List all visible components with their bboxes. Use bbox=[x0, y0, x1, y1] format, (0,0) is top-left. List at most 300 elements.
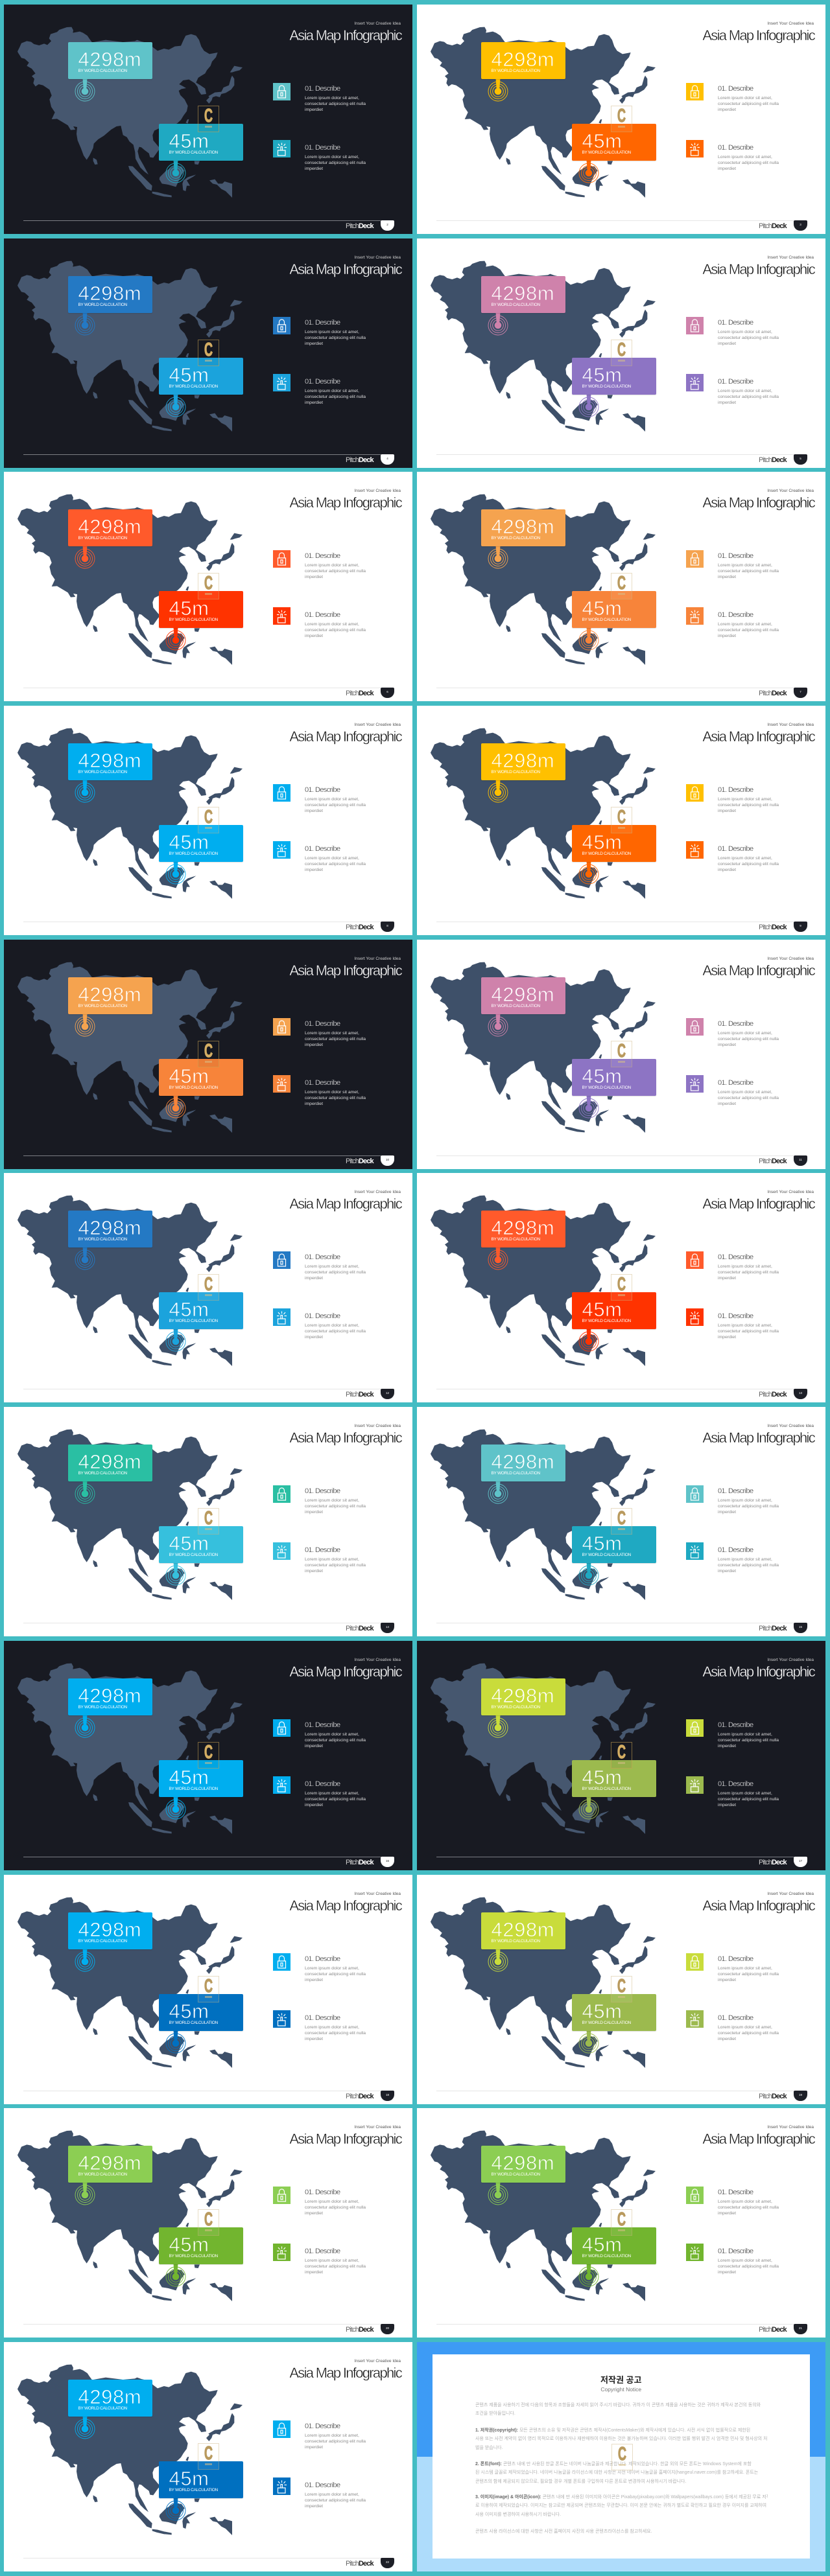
callout 1: 4298m bbox=[78, 2152, 141, 2174]
text 1: Lorem ipsum dolor sit amet, bbox=[305, 1030, 359, 1036]
text 2: Lorem ipsum dolor sit amet, bbox=[305, 1557, 359, 1562]
brand: PitchDeck bbox=[759, 2092, 787, 2100]
paragraph: image and icon: 3. 이미지(image) & 아이콘(icon): 콘텐츠 내에 만 사용된 이미지와 아이콘은 Pixabay(pixabay.com)와 Wallpapers(wallbays.com) 등에서 제공된 무료 저작물 bbox=[475, 2495, 768, 2500]
heading 2: 01. Describe bbox=[718, 377, 753, 385]
callout 1 bbox=[68, 1445, 152, 1481]
paragraph: font bbox=[475, 2460, 768, 2486]
text 1: imperdiet bbox=[305, 575, 323, 579]
paragraph: image and icon: 로 이용하여 제작되었습니다. 이미지는 참고로만 제공되며 콘텐츠와는 무관합니다. 이미 본문 안에는 귀하가 별도로 확인하고 필요한 경우 이미지를 교체하여 bbox=[475, 2503, 766, 2508]
text 1 bbox=[718, 1965, 779, 1983]
text 1: imperdiet bbox=[718, 1276, 736, 1281]
watermark: C bbox=[204, 1041, 213, 1062]
slide 10 bbox=[417, 940, 825, 1169]
text 2: imperdiet bbox=[305, 1803, 323, 1807]
callout 1: BY WORLD CALCULATION bbox=[78, 535, 127, 540]
text 2 bbox=[305, 2491, 366, 2509]
callout 2: BY WORLD CALCULATION bbox=[169, 617, 218, 622]
callout 1: 4298m bbox=[78, 749, 141, 772]
text 2: consectetur adipiscing elit nulla bbox=[305, 862, 366, 866]
text 1: Lorem ipsum dolor sit amet, bbox=[305, 1498, 359, 1502]
callout 2 bbox=[159, 2227, 243, 2264]
text 2: imperdiet bbox=[305, 1569, 323, 1573]
text 1: consectetur adipiscing elit nulla bbox=[718, 1037, 779, 1041]
text 2: Lorem ipsum dolor sit amet, bbox=[305, 389, 359, 393]
marker 2 bbox=[576, 861, 602, 887]
callout 2 bbox=[159, 1526, 243, 1563]
watermark: C bbox=[204, 807, 213, 828]
callout 1: BY WORLD CALCULATION bbox=[492, 535, 540, 540]
slide 4 bbox=[417, 238, 825, 468]
callout 2 bbox=[159, 1760, 243, 1797]
text 1: Lorem ipsum dolor sit amet, bbox=[305, 1732, 359, 1737]
page number bbox=[794, 1857, 807, 1867]
text 2: consectetur adipiscing elit nulla bbox=[718, 1329, 779, 1334]
map bbox=[15, 2123, 248, 2330]
callout 2: BY WORLD CALCULATION bbox=[169, 384, 218, 389]
text 1: Lorem ipsum dolor sit amet, bbox=[718, 2199, 772, 2203]
page number: 8 bbox=[386, 924, 388, 927]
title: Asia Map Infographic bbox=[702, 2131, 814, 2146]
marker 1 bbox=[72, 1247, 98, 1273]
map bbox=[428, 1656, 661, 1863]
heading 2: 01. Describe bbox=[718, 144, 753, 152]
text 2: consectetur adipiscing elit nulla bbox=[305, 2031, 366, 2036]
callout 1: 4298m bbox=[78, 515, 141, 538]
text 2: Lorem ipsum dolor sit amet, bbox=[305, 2258, 359, 2263]
callout 2: 45m bbox=[169, 831, 209, 853]
text 1 bbox=[305, 1264, 366, 1281]
text 1: imperdiet bbox=[305, 1978, 323, 1982]
marker 2 bbox=[578, 628, 599, 651]
page number bbox=[381, 454, 394, 465]
title: Asia Map Infographic bbox=[702, 1663, 814, 1680]
callout 1 bbox=[68, 276, 152, 313]
marker 1 bbox=[488, 79, 508, 101]
callout 1 bbox=[68, 509, 152, 546]
text 2 bbox=[718, 855, 779, 873]
callout 1: 4298m bbox=[78, 48, 141, 71]
title: Asia Map Infographic bbox=[289, 728, 401, 744]
callout 2 bbox=[159, 825, 243, 862]
icon: hand bbox=[273, 1075, 290, 1093]
callout 2: 45m bbox=[169, 1298, 209, 1321]
text 1 bbox=[718, 1497, 779, 1515]
map bbox=[15, 1188, 248, 1395]
watermark: C bbox=[618, 2444, 626, 2465]
watermark bbox=[611, 1508, 632, 1535]
callout 2 bbox=[159, 1059, 243, 1096]
callout 2 bbox=[572, 591, 656, 628]
subtitle: Insert Your Creative Idea bbox=[354, 1658, 401, 1662]
text 1: consectetur adipiscing elit nulla bbox=[305, 1270, 366, 1275]
callout 1: 4298m bbox=[492, 2152, 554, 2174]
icon: lock bbox=[273, 2420, 290, 2438]
heading 1: 01. Describe bbox=[305, 785, 340, 793]
callout 2: 45m bbox=[582, 597, 622, 620]
map bbox=[431, 27, 656, 198]
watermark: C bbox=[617, 573, 626, 594]
brand: PitchDeck bbox=[346, 2560, 374, 2568]
text 1 bbox=[718, 1264, 779, 1281]
callout 1 bbox=[68, 977, 152, 1014]
callout 1: BY WORLD CALCULATION bbox=[78, 1939, 127, 1943]
heading 2: 01. Describe bbox=[718, 1312, 753, 1319]
icon: hand bbox=[273, 1308, 290, 1326]
brand: PitchDeck bbox=[759, 2325, 787, 2333]
icon: hand bbox=[273, 2244, 290, 2261]
callout 1: 4298m bbox=[78, 1216, 141, 1239]
slide 19 bbox=[4, 2108, 412, 2337]
icon: hand bbox=[273, 2010, 290, 2028]
callout 1: BY WORLD CALCULATION bbox=[78, 69, 127, 73]
slide 20 bbox=[417, 2108, 825, 2337]
marker 2 bbox=[576, 1329, 602, 1354]
icon: hand bbox=[273, 841, 290, 859]
page number: 13 bbox=[799, 1391, 802, 1395]
heading 1: 01. Describe bbox=[305, 1721, 340, 1729]
icon: lock bbox=[273, 83, 290, 100]
watermark bbox=[611, 1274, 632, 1301]
paragraph: font: 된 시스템 글꼴로 제작되었습니다. 네이버 나눔글꼴 라이선스에 대한 사항은 사전 네이버 나눔글꼴 홈페이지(hangeul.naver.com)를 참고하세요. 폰트는 bbox=[475, 2470, 758, 2475]
callout 2: BY WORLD CALCULATION bbox=[169, 2487, 218, 2492]
text 2: Lorem ipsum dolor sit amet, bbox=[305, 1090, 359, 1094]
brand: PitchDeck bbox=[759, 1391, 787, 1398]
heading 1: 01. Describe bbox=[305, 1487, 340, 1494]
callout 1: 4298m bbox=[78, 1918, 141, 1941]
callout 1: 4298m bbox=[492, 749, 554, 772]
callout 1: 4298m bbox=[492, 282, 554, 305]
brand: PitchDeck bbox=[346, 1391, 374, 1398]
callout 1 bbox=[481, 977, 565, 1014]
brand: PitchDeck bbox=[759, 456, 787, 464]
page number bbox=[381, 1389, 394, 1399]
callout 2: BY WORLD CALCULATION bbox=[169, 1553, 218, 1557]
icon: lock bbox=[686, 1719, 704, 1737]
page number: 2 bbox=[386, 223, 388, 226]
text 2 bbox=[718, 2258, 779, 2275]
callout 1: BY WORLD CALCULATION bbox=[492, 2172, 540, 2176]
text 1 bbox=[305, 2433, 366, 2450]
callout 1 bbox=[481, 2146, 565, 2183]
closing paragraph: 콘텐츠 사용 라이선스에 대한 사항은 사전 홈페이지 사진의 사용 콘텐츠라이선스를 참고하세요. bbox=[475, 2529, 652, 2534]
watermark: C bbox=[617, 1742, 626, 1763]
paragraph: image and icon bbox=[475, 2493, 768, 2519]
callout 2: BY WORLD CALCULATION bbox=[169, 150, 218, 154]
heading 2: 01. Describe bbox=[718, 610, 753, 618]
text 2: Lorem ipsum dolor sit amet, bbox=[305, 622, 359, 626]
text 1: consectetur adipiscing elit nulla bbox=[718, 803, 779, 807]
heading 1: 01. Describe bbox=[718, 1020, 753, 1028]
heading 1: 01. Describe bbox=[305, 552, 340, 560]
heading 1: 01. Describe bbox=[718, 1955, 753, 1962]
page number: 12 bbox=[386, 1391, 389, 1395]
callout 2 bbox=[572, 1760, 656, 1797]
map bbox=[18, 27, 243, 198]
callout 1: 4298m bbox=[492, 1216, 554, 1239]
text 1 bbox=[305, 96, 366, 112]
page number bbox=[794, 2324, 807, 2334]
watermark: C bbox=[617, 1508, 626, 1529]
icon: hand bbox=[686, 374, 704, 391]
subtitle: Insert Your Creative Idea bbox=[354, 255, 401, 259]
text 2: consectetur adipiscing elit nulla bbox=[718, 628, 779, 632]
callout 1: BY WORLD CALCULATION bbox=[492, 770, 540, 774]
text 1 bbox=[305, 1732, 366, 1749]
icon: lock bbox=[686, 317, 704, 334]
marker 2 bbox=[166, 395, 185, 417]
text 2: Lorem ipsum dolor sit amet, bbox=[718, 1323, 772, 1327]
page number: 15 bbox=[799, 1625, 802, 1629]
map bbox=[428, 955, 661, 1162]
map bbox=[431, 494, 656, 665]
paragraph: image and icon: 사용 이미지를 변경하여 사용하시기 바랍니다. bbox=[475, 2512, 561, 2517]
text 1 bbox=[305, 1965, 366, 1983]
paragraph: copyright: 사용 또는 사전 계약이 없이 영리 목적으로 이용하거나 재판매하여 이용하는 것은 불가능하며 있습니다. 이러한 법률 행위 발견 시 엄격한 민사 및 형사상의 처 bbox=[475, 2437, 767, 2441]
callout 2 bbox=[572, 2227, 656, 2264]
heading 1: 01. Describe bbox=[718, 1253, 753, 1261]
text 2: Lorem ipsum dolor sit amet, bbox=[718, 1557, 772, 1562]
text 1: consectetur adipiscing elit nulla bbox=[718, 1270, 779, 1275]
callout 2: 45m bbox=[582, 1766, 622, 1789]
watermark bbox=[198, 1274, 219, 1301]
callout 2 bbox=[572, 1526, 656, 1563]
slide 12 bbox=[417, 1173, 825, 1402]
callout 1 bbox=[481, 1912, 565, 1949]
heading 1: 01. Describe bbox=[718, 785, 753, 793]
callout 2: 45m bbox=[169, 130, 209, 152]
text 1: Lorem ipsum dolor sit amet, bbox=[305, 1264, 359, 1269]
text 2 bbox=[718, 622, 779, 638]
watermark bbox=[198, 106, 219, 132]
page number bbox=[381, 1623, 394, 1633]
icon: hand bbox=[686, 2010, 704, 2028]
text 2: imperdiet bbox=[305, 400, 323, 405]
heading 1: 01. Describe bbox=[718, 2188, 753, 2196]
watermark: C bbox=[204, 1742, 213, 1763]
callout 1 bbox=[481, 743, 565, 780]
callout 2: BY WORLD CALCULATION bbox=[582, 1786, 631, 1791]
brand: PitchDeck bbox=[346, 1624, 374, 1632]
icon: lock bbox=[273, 1953, 290, 1971]
icon: hand bbox=[686, 2244, 704, 2261]
brand: PitchDeck bbox=[346, 1859, 374, 1866]
intro paragraph: 조건을 받아들입니다. bbox=[475, 2411, 516, 2416]
text 2: consectetur adipiscing elit nulla bbox=[718, 862, 779, 866]
map bbox=[15, 2357, 248, 2564]
text 2: imperdiet bbox=[718, 167, 736, 171]
text 2: consectetur adipiscing elit nulla bbox=[305, 395, 366, 399]
title: Asia Map Infographic bbox=[702, 962, 814, 979]
brand: PitchDeck bbox=[759, 923, 787, 931]
text 1: consectetur adipiscing elit nulla bbox=[718, 336, 779, 340]
callout 1: 4298m bbox=[492, 515, 554, 538]
subtitle: Insert Your Creative Idea bbox=[354, 2124, 401, 2129]
callout 1: BY WORLD CALCULATION bbox=[492, 1939, 540, 1943]
callout 1 bbox=[68, 1678, 152, 1715]
page number bbox=[381, 220, 394, 231]
watermark: C bbox=[204, 1976, 213, 1997]
page number: 17 bbox=[799, 1859, 802, 1862]
title: Asia Map Infographic bbox=[289, 2131, 401, 2146]
title: Asia Map Infographic bbox=[289, 261, 401, 277]
text 1: imperdiet bbox=[718, 342, 736, 346]
icon: hand bbox=[686, 1542, 704, 1560]
heading 2: 01. Describe bbox=[718, 1780, 753, 1787]
icon: lock bbox=[686, 784, 704, 802]
callout 1: BY WORLD CALCULATION bbox=[78, 770, 127, 774]
callout 1: BY WORLD CALCULATION bbox=[492, 1471, 540, 1475]
callout 1 bbox=[68, 2380, 152, 2417]
paragraph: font: 2. 폰트(font): 콘텐츠 내에 만 사용된 한글 폰트는 네이버 나눔글꼴과 제공합니다. 제작되었습니다. 한글 외의 모든 폰트는 Windows System에 포함 bbox=[475, 2462, 752, 2466]
callout 2: 45m bbox=[582, 2000, 622, 2023]
text 2: imperdiet bbox=[305, 2270, 323, 2275]
text 2 bbox=[305, 154, 366, 171]
callout 1: BY WORLD CALCULATION bbox=[492, 302, 540, 307]
brand: PitchDeck bbox=[759, 1624, 787, 1632]
slide 2 bbox=[417, 5, 825, 233]
subtitle: Insert Your Creative Idea bbox=[767, 21, 814, 26]
title: Asia Map Infographic bbox=[702, 27, 814, 43]
title: Asia Map Infographic bbox=[289, 962, 401, 979]
text 1: consectetur adipiscing elit nulla bbox=[305, 2205, 366, 2210]
title: Asia Map Infographic bbox=[289, 27, 401, 43]
callout 1: BY WORLD CALCULATION bbox=[492, 1003, 540, 1008]
watermark bbox=[611, 106, 632, 132]
page number bbox=[794, 1623, 807, 1633]
map bbox=[428, 721, 661, 928]
text 2: consectetur adipiscing elit nulla bbox=[305, 628, 366, 632]
copyright subheading: Copyright Notice bbox=[600, 2386, 641, 2393]
slide 16 bbox=[417, 1641, 825, 1870]
marker 2 bbox=[576, 1562, 602, 1588]
callout 1 bbox=[481, 1678, 565, 1715]
text 1: imperdiet bbox=[718, 1510, 736, 1514]
heading 2: 01. Describe bbox=[305, 2247, 340, 2255]
page number bbox=[381, 1857, 394, 1867]
text 2: imperdiet bbox=[305, 167, 323, 171]
text 2 bbox=[718, 1790, 779, 1808]
marker 1 bbox=[72, 1481, 98, 1507]
callout 2: 45m bbox=[169, 2233, 209, 2256]
brand: PitchDeck bbox=[346, 923, 374, 931]
title: Asia Map Infographic bbox=[289, 2364, 401, 2381]
icon: hand bbox=[686, 140, 704, 157]
page number bbox=[794, 2091, 807, 2101]
text 1: Lorem ipsum dolor sit amet, bbox=[305, 96, 359, 100]
text 2: consectetur adipiscing elit nulla bbox=[718, 2264, 779, 2269]
icon: lock bbox=[273, 550, 290, 568]
map bbox=[428, 2123, 661, 2330]
text 1: consectetur adipiscing elit nulla bbox=[305, 1738, 366, 1743]
text 1: imperdiet bbox=[718, 809, 736, 813]
icon: lock bbox=[686, 2187, 704, 2204]
title: Asia Map Infographic bbox=[289, 1195, 401, 1212]
callout 2 bbox=[572, 825, 656, 862]
icon: hand bbox=[686, 607, 704, 625]
text 1: consectetur adipiscing elit nulla bbox=[305, 1504, 366, 1509]
text 2: consectetur adipiscing elit nulla bbox=[718, 2031, 779, 2036]
text 2 bbox=[305, 2258, 366, 2275]
callout 2 bbox=[159, 1994, 243, 2031]
heading 1: 01. Describe bbox=[305, 2188, 340, 2196]
subtitle: Insert Your Creative Idea bbox=[767, 1658, 814, 1662]
callout 2: 45m bbox=[169, 597, 209, 620]
page number bbox=[381, 2558, 394, 2568]
text 1: Lorem ipsum dolor sit amet, bbox=[305, 2433, 359, 2438]
watermark: C bbox=[617, 1041, 626, 1062]
text 1: Lorem ipsum dolor sit amet, bbox=[718, 1030, 772, 1036]
brand: PitchDeck bbox=[759, 222, 787, 229]
callout 1: BY WORLD CALCULATION bbox=[78, 1003, 127, 1008]
page number: 18 bbox=[386, 2093, 389, 2096]
marker 2 bbox=[576, 1796, 602, 1822]
text 1: Lorem ipsum dolor sit amet, bbox=[718, 1966, 772, 1970]
text 1: Lorem ipsum dolor sit amet, bbox=[718, 1498, 772, 1502]
brand: PitchDeck bbox=[346, 2092, 374, 2100]
marker 2 bbox=[576, 2030, 602, 2056]
marker 1 bbox=[72, 2416, 98, 2442]
page number: 21 bbox=[799, 2327, 802, 2330]
watermark bbox=[611, 2209, 632, 2236]
brand: PitchDeck bbox=[759, 690, 787, 697]
marker 2 bbox=[163, 1095, 189, 1121]
paragraph: copyright: 벌을 받습니다. bbox=[475, 2446, 503, 2450]
slide 17 bbox=[4, 1875, 412, 2104]
callout 2: BY WORLD CALCULATION bbox=[582, 1553, 631, 1557]
callout 2 bbox=[572, 1292, 656, 1329]
callout 1: 4298m bbox=[78, 983, 141, 1006]
callout 1: BY WORLD CALCULATION bbox=[78, 1236, 127, 1242]
text 2: Lorem ipsum dolor sit amet, bbox=[718, 1090, 772, 1094]
text 1: consectetur adipiscing elit nulla bbox=[305, 1037, 366, 1041]
paragraph: copyright bbox=[475, 2426, 768, 2452]
text 2: imperdiet bbox=[718, 1335, 736, 1340]
slide 9 bbox=[4, 940, 412, 1169]
text 1: imperdiet bbox=[305, 2211, 323, 2216]
callout 1: 4298m bbox=[78, 1450, 141, 1473]
page number: 10 bbox=[386, 1158, 389, 1161]
text 1: Lorem ipsum dolor sit amet, bbox=[305, 1966, 359, 1970]
page number bbox=[381, 1155, 394, 1166]
callout 1 bbox=[481, 42, 565, 79]
text 2: imperdiet bbox=[718, 1102, 736, 1106]
brand: PitchDeck bbox=[346, 690, 374, 697]
text 2: imperdiet bbox=[718, 1569, 736, 1573]
title: Asia Map Infographic bbox=[702, 494, 814, 511]
title: Asia Map Infographic bbox=[702, 728, 814, 744]
brand: PitchDeck bbox=[346, 456, 374, 464]
icon: lock bbox=[686, 1018, 704, 1036]
text 2 bbox=[718, 2025, 779, 2042]
marker 2 bbox=[578, 161, 599, 183]
map bbox=[18, 728, 243, 899]
callout 2 bbox=[159, 591, 243, 628]
page number bbox=[381, 2324, 394, 2334]
text 1 bbox=[718, 1030, 779, 1048]
subtitle: Insert Your Creative Idea bbox=[767, 1423, 814, 1428]
callout 1 bbox=[68, 2146, 152, 2183]
heading 1: 01. Describe bbox=[305, 1955, 340, 1962]
text 2 bbox=[718, 1322, 779, 1340]
callout 1: BY WORLD CALCULATION bbox=[492, 69, 540, 73]
callout 2: BY WORLD CALCULATION bbox=[169, 1786, 218, 1791]
callout 2 bbox=[572, 124, 656, 161]
text 1 bbox=[718, 2198, 779, 2216]
subtitle: Insert Your Creative Idea bbox=[767, 255, 814, 259]
intro paragraph: 콘텐츠 제품을 사용하기 전에 다음의 항목과 조항들을 자세히 읽어 주시기 바랍니다. 귀하가 이 콘텐츠 제품을 사용하는 것은 귀하가 제작사 본건의 동의와 bbox=[475, 2403, 761, 2408]
marker 1 bbox=[72, 1014, 98, 1039]
callout 2 bbox=[159, 358, 243, 395]
